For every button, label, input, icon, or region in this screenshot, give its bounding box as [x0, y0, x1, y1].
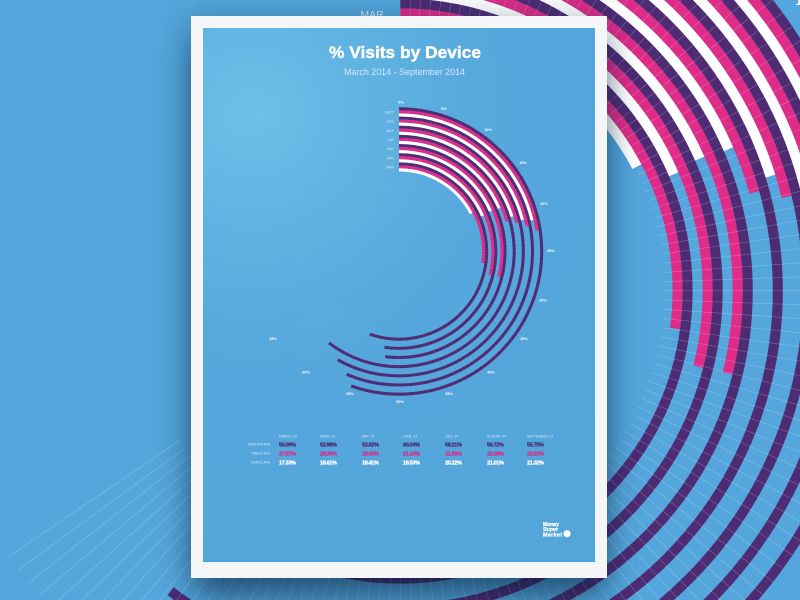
ring month labels: JULY [386, 129, 395, 133]
ring month labels: SEPT [385, 110, 394, 114]
percentage scale labels: 55% [346, 392, 354, 396]
mobile row: 17.33% [279, 460, 296, 466]
percentage scale labels: 45% [445, 392, 453, 396]
tablet row: 22.26% [487, 452, 504, 458]
ring month labels [385, 110, 395, 170]
percentage scale labels: 0% [398, 100, 404, 104]
subtitle: March 2014 - September 2014 [344, 67, 465, 77]
poster content [248, 46, 571, 538]
mobile row: 21.01% [487, 460, 504, 466]
icon: logo badge [563, 530, 571, 537]
percentage scale labels: 20% [540, 202, 548, 206]
blue poster panel [203, 28, 595, 562]
mobile row: 18.41% [362, 460, 379, 466]
percentage scale labels: 15% [519, 161, 527, 165]
tablet row: 21.24% [403, 452, 420, 458]
percentage scale labels: 25% [547, 249, 555, 253]
ring month labels: AUG [387, 120, 394, 124]
percentage scale labels: 10% [484, 128, 492, 132]
desktop row: 52.62% [362, 442, 379, 448]
table month headers: MARCH '14 [279, 434, 297, 438]
table row labels [248, 442, 271, 464]
tablet row: 28.39% [320, 452, 337, 458]
mobile row: 18.61% [320, 460, 337, 466]
tablet row: 22.91% [527, 452, 544, 458]
desktop row: 58.21% [445, 442, 462, 448]
background: enlarged radial chart: MAR [360, 9, 384, 21]
mobile row: 18.53% [403, 460, 420, 466]
table month headers: JULY '14 [445, 434, 458, 438]
ring month labels: MAY [387, 147, 395, 151]
table month headers: SEPTEMBER '14 [527, 434, 553, 438]
ring month labels: APR [387, 156, 395, 160]
percentage scale labels: 40% [487, 370, 495, 374]
data table [248, 434, 553, 466]
desktop row: 55.75% [527, 442, 544, 448]
table month headers: JUNE '14 [403, 434, 417, 438]
desktop row [279, 442, 544, 448]
table month headers [279, 434, 553, 438]
table row labels: DESKTOP AVG. [248, 442, 271, 446]
ring month labels: MAR [386, 166, 395, 170]
percentage scale labels: 60% [302, 370, 310, 374]
radial bar chart [256, 109, 542, 394]
table row labels: MOBILE AVG. [251, 460, 271, 464]
table row labels: TABLET AVG. [251, 452, 271, 456]
percentage scale labels: 65% [269, 337, 277, 341]
table month headers: APRIL '14 [320, 434, 335, 438]
mobile row [279, 460, 544, 466]
percentage scale labels: 30% [539, 298, 547, 302]
desktop row: 56.72% [487, 442, 504, 448]
tablet row: 28.95% [362, 452, 379, 458]
mobile row: 21.32% [527, 460, 544, 466]
tablet row: 27.57% [279, 452, 296, 458]
percentage scale labels [269, 100, 555, 404]
poster sheet [191, 16, 607, 578]
title: % Visits by Device [329, 43, 481, 62]
desktop row: 60.04% [403, 442, 420, 448]
tablet row: 21.56% [445, 452, 462, 458]
logo [543, 522, 571, 538]
mobile row: 20.22% [445, 460, 462, 466]
desktop row: 52.98% [320, 442, 337, 448]
percentage scale labels: 50% [396, 400, 404, 404]
percentage scale labels: 5% [441, 107, 447, 111]
table month headers: AUGUST '14 [487, 434, 507, 438]
logo: Super [543, 527, 559, 533]
logo: Money [543, 522, 559, 528]
table month headers: MAY '14 [362, 434, 375, 438]
desktop row: 55.09% [279, 442, 296, 448]
tablet row [279, 452, 544, 458]
ring month labels: JUN [387, 138, 395, 142]
logo: Market [543, 532, 562, 538]
percentage scale labels: 35% [520, 337, 528, 341]
